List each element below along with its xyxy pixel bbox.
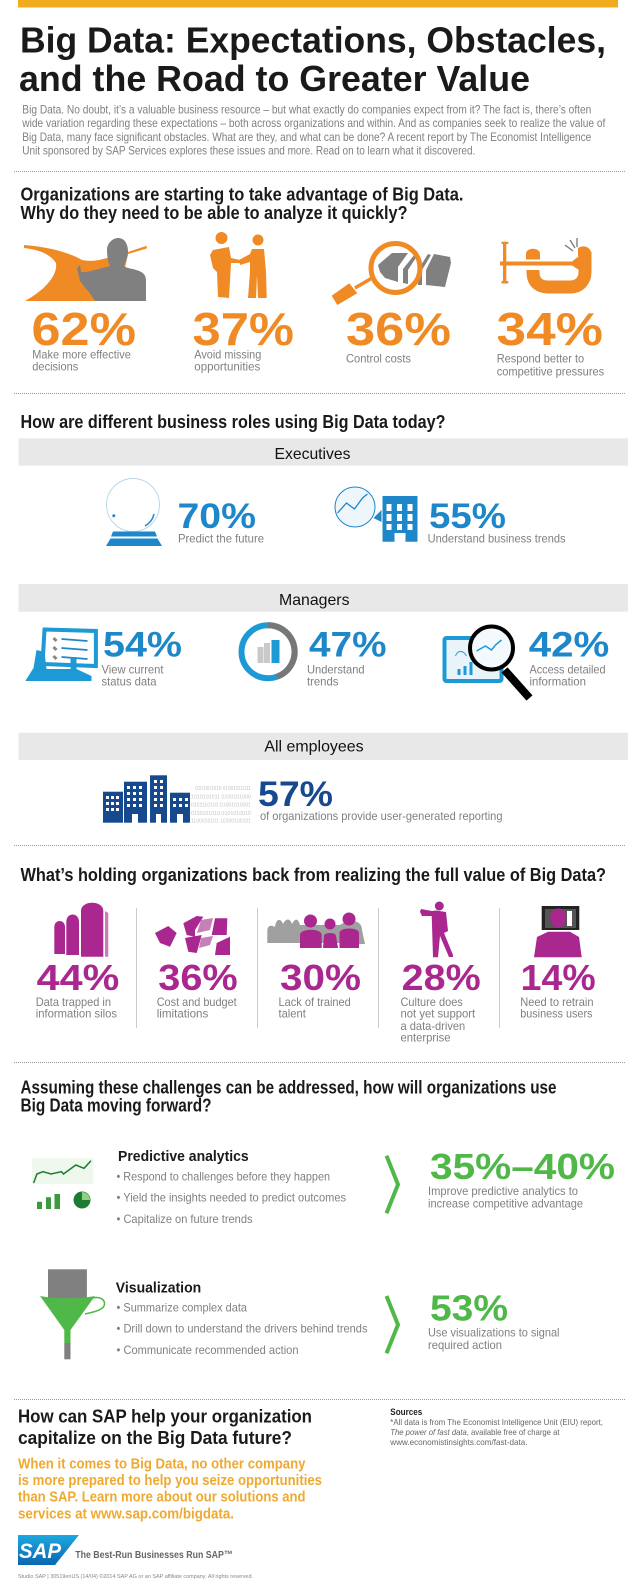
stat: 55% business trends: 55% <box>429 497 506 536</box>
icon: ring with bars <box>242 625 295 678</box>
stat: 30% talent: Lack of trained <box>278 995 351 1009</box>
binary stream: 0110101010 0101010010 <box>191 811 251 817</box>
stat: 54% status data: 54% <box>103 626 182 665</box>
tagline: The Best-Run Businesses Run SAP™ <box>75 1549 233 1561</box>
stat: 44% silos: Data trapped in <box>36 995 111 1009</box>
icon: green charts <box>32 1158 93 1209</box>
heading: moving forward: Big Data moving forward? <box>20 1096 212 1116</box>
stat: 42% detailed info: information <box>530 675 586 689</box>
icon: tablet with checklist <box>25 630 96 681</box>
call to action: than SAP. Learn more about our solutions and <box>18 1490 306 1506</box>
panel: managers header: Managers <box>279 592 350 609</box>
icon: silos <box>54 903 108 957</box>
arrow: chevron <box>386 1296 398 1353</box>
stat: 28% culture: not yet support <box>400 1007 476 1021</box>
stat: 44% silos <box>36 903 119 1021</box>
stat: 57% user-generated reporting: 57% <box>258 775 333 814</box>
stat: 14% retrain: business users <box>520 1007 592 1021</box>
heading: moving forward <box>20 1077 556 1116</box>
call to action <box>18 1456 322 1522</box>
SAP logo <box>18 1535 79 1565</box>
stat: 36% budget: limitations <box>157 1007 208 1021</box>
bullet list: • Capitalize on future trends <box>116 1212 252 1226</box>
panel: visualization: required action <box>428 1338 502 1352</box>
top accent bar <box>18 0 618 8</box>
stat: 62% decisions <box>24 238 147 374</box>
stat: 62% decisions: 62% <box>32 303 136 355</box>
panel: managers header <box>18 584 628 612</box>
icon: clamp <box>500 238 592 287</box>
panel: executives header: Executives <box>274 446 350 463</box>
heading: how can SAP help: How can SAP help your organization <box>18 1406 312 1426</box>
call to action: is more prepared to help you seize opportunities <box>18 1473 322 1489</box>
stat: 36% costs: Control costs <box>346 352 411 366</box>
column dividers <box>136 908 500 1028</box>
heading: business roles: How are different business roles using Big Data today? <box>20 412 446 432</box>
stat: 44% silos: 44% <box>37 957 119 998</box>
icon: cash bundles <box>155 916 230 955</box>
stat: 14% retrain: 14% <box>521 957 596 998</box>
panel: predictive analytics <box>32 1146 615 1226</box>
panel: visualization: Visualization <box>116 1279 201 1296</box>
heading: why analyze quickly <box>20 185 464 223</box>
stat: 34% pressures: Respond better to <box>497 352 584 366</box>
sources <box>389 1407 603 1447</box>
panel: visualization <box>40 1269 560 1359</box>
bullet list: • Yield the insights needed to predict outcomes <box>116 1191 346 1205</box>
bullet list: • Summarize complex data <box>116 1301 247 1315</box>
panel: predictive analytics: Improve predictive analytics to <box>428 1184 578 1198</box>
icon: man presenting <box>420 902 453 957</box>
stat: 30% talent <box>267 912 365 1021</box>
intro paragraph <box>21 102 606 158</box>
stat: 37% opportunities <box>192 232 294 374</box>
title: Big Data: Expectations, Obstacles, <box>20 20 606 60</box>
stat: 36% costs: 36% <box>346 303 451 355</box>
stat: 28% culture: enterprise <box>400 1031 451 1045</box>
panel: predictive analytics: increase competitive advantage <box>428 1196 583 1210</box>
sources: The power of fast data, available free of charge at <box>390 1427 560 1437</box>
stat: 62% decisions: Make more effective <box>32 347 131 361</box>
icon: chart bubble and building <box>335 487 418 542</box>
stat: 55% business trends <box>335 487 566 546</box>
stat: 14% retrain <box>520 906 596 1021</box>
icon: person at screen <box>534 906 582 957</box>
stat: 42% detailed info: 42% <box>529 626 609 665</box>
stat: 34% pressures: 34% <box>496 303 603 355</box>
title: and the Road to Greater Value <box>19 58 530 99</box>
stat: 54% status data <box>25 626 182 689</box>
stat: 36% costs <box>332 244 451 366</box>
bullet list: • Respond to challenges before they happen <box>116 1170 330 1184</box>
stat: 47% trends: Understand <box>307 662 365 676</box>
sources: www.economistinsights.com/fast-data. <box>389 1437 528 1447</box>
icon: crystal ball <box>106 478 162 546</box>
stat: 30% talent: talent <box>278 1007 306 1021</box>
panel: predictive analytics: Predictive analytics <box>118 1148 249 1165</box>
bullet list <box>116 1301 368 1357</box>
stat: 47% trends <box>242 625 386 689</box>
stat: 70% predict the future: 70% <box>178 497 256 536</box>
stat: 70% predict the future: Predict the future <box>178 532 264 546</box>
legal line: Studio SAP | 30519enUS (14/04) ©2014 SAP AG or an SAP affiliate company. All rights reserved. <box>18 1573 253 1580</box>
heading: why analyze quickly: Organizations are starting to take advantage of Big Data. <box>20 185 464 205</box>
stat: 28% culture: 28% <box>402 957 481 998</box>
stat: 36% budget: Cost and budget <box>157 995 237 1009</box>
stat: 47% trends: trends <box>307 675 338 689</box>
binary stream: 1010101011 0100101000 <box>191 794 251 800</box>
stat: 34% pressures: competitive pressures <box>497 364 604 378</box>
stat: 28% culture: a data-driven <box>400 1019 465 1033</box>
panel: all employees header: All employees <box>264 739 364 756</box>
SAP logo: SAP <box>19 1540 62 1563</box>
arrow: chevron <box>386 1156 398 1213</box>
stat: 30% talent: 30% <box>280 957 361 998</box>
stat: 55% business trends: Understand business trends <box>428 532 566 546</box>
call to action: When it comes to Big Data, no other company <box>18 1456 306 1472</box>
stat: 28% culture <box>400 902 481 1045</box>
stat: 28% culture: Culture does <box>400 995 463 1009</box>
bullet list: • Communicate recommended action <box>116 1343 298 1357</box>
heading: how can SAP help: capitalize on the Big Data future? <box>18 1428 292 1448</box>
binary stream: 1100010101 10100100101 <box>191 819 251 825</box>
icon: buildings <box>103 775 190 823</box>
heading: how can SAP help <box>18 1406 312 1448</box>
stat: 47% trends: 47% <box>309 626 386 665</box>
panel: all employees header <box>18 733 628 760</box>
stat: 54% status data: status data <box>102 675 157 689</box>
icon: road and silhouette <box>24 238 147 301</box>
icon: handshake <box>210 232 267 298</box>
stat: 34% pressures <box>496 238 604 378</box>
binary stream: 0101110101 01001010001 <box>191 803 251 809</box>
stat: 36% budget <box>155 916 238 1021</box>
stat: 54% status data: View current <box>102 662 164 676</box>
stat: 37% opportunities: Avoid missing <box>194 347 261 361</box>
stat: 44% silos: information silos <box>36 1007 117 1021</box>
stat: 57% user-generated reporting: of organizations provide user-generated reporting <box>260 809 502 823</box>
sources: *All data is from The Economist Intelligence Unit (EIU) report, <box>390 1417 603 1427</box>
icon: crowd <box>267 912 365 948</box>
stat: 57% user-generated reporting <box>103 775 502 825</box>
heading: why analyze quickly: Why do they need to be able to analyze it quickly? <box>20 203 408 223</box>
stat: 42% detailed info <box>444 626 609 698</box>
bullet list <box>116 1170 346 1226</box>
stat: 14% retrain: Need to retrain <box>520 995 594 1009</box>
bullet list: • Drill down to understand the drivers behind trends <box>116 1322 368 1336</box>
stat: 37% opportunities: opportunities <box>194 360 260 374</box>
panel: executives header <box>18 438 628 466</box>
panel: visualization: Use visualizations to signal <box>428 1326 560 1340</box>
stat: 42% detailed info: Access detailed <box>530 662 606 676</box>
intro paragraph: Unit sponsored by SAP Services explores these issues and more. Read on to learn what it discovered. <box>22 144 475 158</box>
icon: funnel <box>40 1269 104 1359</box>
heading: moving forward: Assuming these challenges can be addressed, how will organizations use <box>20 1077 556 1097</box>
binary stream <box>191 786 251 825</box>
call to action: services at www.sap.com/bigdata. <box>18 1506 234 1522</box>
panel: visualization: 53% <box>430 1288 508 1329</box>
stat: 70% predict the future <box>106 478 264 546</box>
title <box>19 20 606 99</box>
icon: magnified chart <box>444 626 530 698</box>
stat: 62% decisions: decisions <box>32 360 78 374</box>
binary stream: 0101001010 01001010111 <box>195 786 251 792</box>
stat: 36% budget: 36% <box>158 957 238 998</box>
sources: Sources <box>390 1407 422 1417</box>
stat: 37% opportunities: 37% <box>192 303 294 355</box>
panel: predictive analytics: 35%–40% <box>430 1146 615 1187</box>
icon: magnifier over money <box>332 244 451 305</box>
